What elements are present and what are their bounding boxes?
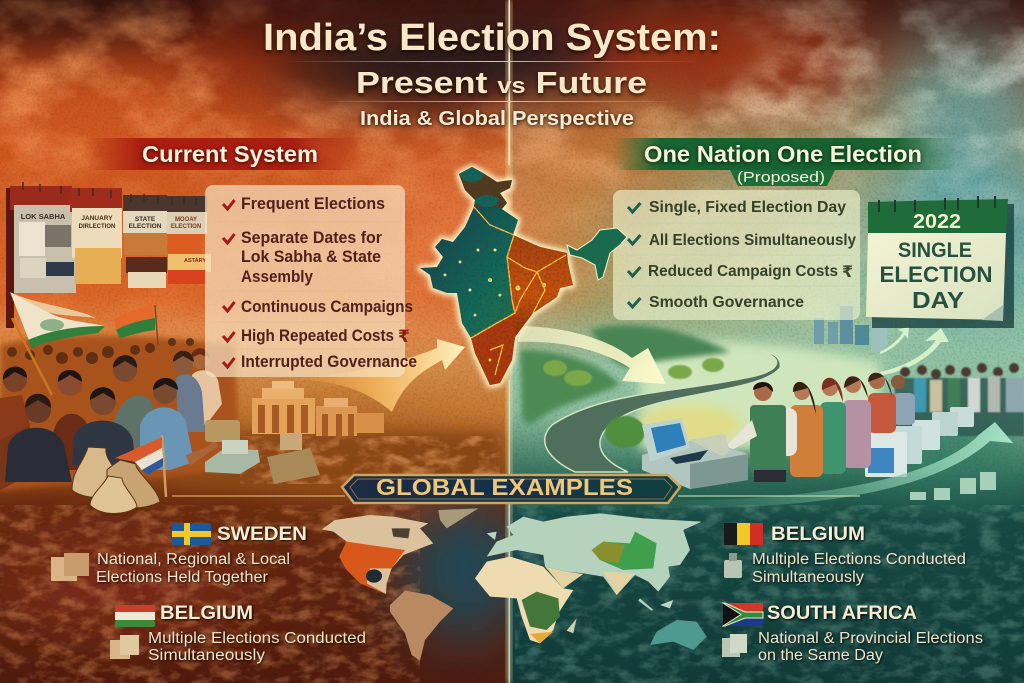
calendar: single election day	[866, 196, 1014, 328]
global examples section	[51, 474, 983, 664]
election calendars	[6, 182, 211, 328]
machine boxes	[205, 420, 320, 484]
list right: Smooth Governance	[649, 294, 804, 311]
road and river scene	[520, 325, 880, 472]
arrow into road	[518, 326, 666, 384]
world map	[322, 508, 707, 661]
flag: large tricolour	[10, 292, 105, 395]
distant crowd	[0, 336, 240, 490]
example: Sweden: National, Regional & Local	[97, 551, 290, 568]
panel: one nation one election	[612, 138, 957, 320]
heading banner: one nation one election	[612, 138, 957, 186]
arrow up 2	[880, 328, 949, 375]
example: South Africa	[722, 603, 983, 664]
calendar: Lok Sabha	[10, 186, 76, 293]
money bags	[72, 447, 160, 514]
ground mottling	[0, 505, 420, 683]
calendar: single election day: DAY	[912, 287, 964, 313]
person brown	[52, 370, 92, 470]
voter 3	[820, 378, 846, 474]
list left: Separate Dates for	[241, 228, 382, 247]
calendar: Monday election: ASTARY	[184, 258, 206, 264]
North America	[322, 515, 433, 594]
voter 4	[843, 376, 871, 468]
heading line 2: Present vs Future	[356, 65, 647, 100]
India map	[410, 160, 627, 400]
small upward arrows	[880, 326, 949, 375]
city skyline	[814, 306, 887, 352]
electronic voting machine	[642, 418, 748, 489]
arrow up 1	[880, 326, 909, 354]
eastern region	[508, 232, 573, 337]
man in green vest	[726, 382, 797, 482]
heading banner: current system	[84, 138, 364, 170]
example: Sweden	[51, 523, 307, 586]
flag on pole	[115, 435, 166, 497]
temple 2	[316, 398, 357, 436]
list left: Lok Sabha & State	[241, 247, 381, 266]
calendar: January	[70, 188, 122, 284]
north-east states	[567, 228, 627, 280]
list left: Continuous Campaigns	[241, 297, 413, 316]
northern region	[459, 167, 512, 208]
example: Sweden: Elections Held Together	[96, 569, 268, 586]
warm tint over clouds	[0, 0, 1024, 370]
example: Sweden: SWEDEN	[217, 524, 307, 545]
example: Belgium right: Simultaneously	[752, 569, 864, 586]
ballot boxes row	[865, 407, 996, 500]
list right: Single, Fixed Election Day	[649, 199, 846, 216]
example: Belgium left: Simultaneously	[148, 647, 265, 664]
calendar: Monday election	[167, 196, 211, 284]
list left	[241, 194, 417, 371]
example: South Africa: SOUTH AFRICA	[767, 603, 917, 624]
voter 6	[891, 375, 915, 425]
Eurasia	[487, 513, 702, 595]
voter 5	[868, 373, 896, 433]
crowd queue right	[895, 363, 1024, 436]
checks left	[223, 200, 234, 367]
heading banner: one nation one election: (Proposed)	[737, 169, 825, 186]
divider rails	[172, 495, 860, 497]
ballot boxes and money bags	[72, 420, 320, 514]
example: Belgium left	[110, 603, 366, 664]
person front dark	[5, 394, 72, 482]
subtitle: India & Global Perspective	[360, 108, 634, 130]
calendar: State election	[123, 195, 167, 288]
field and river	[640, 341, 880, 452]
Greenland	[438, 508, 478, 528]
list left: Frequent Elections	[241, 194, 385, 213]
title rule 2	[320, 101, 680, 102]
example: Belgium right: BELGIUM	[771, 524, 865, 545]
calendar: State election: ELECTION	[129, 223, 162, 230]
heading banner: current system: Current System	[142, 141, 318, 167]
calendar: single election day: SINGLE	[898, 239, 972, 262]
centre glow line	[507, 0, 511, 683]
left curved arrow	[290, 339, 465, 412]
title block	[263, 17, 721, 130]
example: Belgium left: BELGIUM	[160, 603, 253, 624]
calendar rings	[879, 196, 995, 212]
list right	[648, 199, 856, 311]
rings	[23, 182, 196, 206]
list left: ₹	[398, 327, 410, 346]
person blue-grey back	[173, 351, 205, 432]
example: South Africa: National & Provincial Elections	[758, 630, 983, 647]
heading banner: one nation one election: One Nation One Election	[644, 141, 922, 167]
person slate back	[112, 355, 153, 450]
title rule 1	[285, 61, 700, 62]
voters in line	[726, 373, 915, 482]
green sweep arrow	[660, 422, 1013, 508]
Africa	[475, 557, 573, 643]
bush	[605, 416, 645, 448]
flag: small tricolour	[114, 300, 158, 345]
EVM screen	[651, 423, 686, 453]
checks right	[628, 203, 640, 307]
banner: global examples	[342, 474, 680, 503]
person left edge	[0, 367, 40, 490]
calendar: State election: STATE	[135, 216, 156, 223]
person far right cream	[191, 348, 222, 425]
field foliage	[240, 436, 500, 484]
scene left: earth and temple	[175, 381, 500, 486]
left crowd	[0, 292, 240, 490]
example: South Africa: on the Same Day	[758, 647, 883, 664]
calendar: Lok Sabha: LOK SABHA	[21, 212, 66, 221]
China region	[592, 532, 657, 570]
calendar: single election day: ELECTION	[880, 262, 992, 287]
example: Belgium left: Multiple Elections Conducted	[148, 630, 366, 647]
road	[545, 352, 780, 472]
calendar: January: DIRLECTION	[79, 224, 115, 230]
temple 3	[356, 413, 384, 433]
example: Belgium right: Multiple Elections Conducted	[752, 551, 966, 568]
calendar: Monday election: ELECTION	[171, 224, 201, 230]
calendar: Monday election: MOOAY	[175, 217, 197, 223]
heading line 1: India’s Election System:	[263, 17, 721, 59]
person blue shirt	[140, 378, 218, 470]
list right: ₹	[842, 264, 853, 281]
cloud texture	[0, 0, 1024, 345]
South America	[390, 591, 453, 661]
Australia and islands	[650, 620, 707, 650]
list left: Assembly	[241, 267, 313, 286]
forest hills	[520, 325, 730, 425]
calendar: single election day: 2022	[913, 211, 961, 233]
banner: global examples: GLOBAL EXAMPLES	[376, 474, 633, 500]
calendar: January: JANUARY	[81, 215, 113, 222]
southern region	[471, 314, 516, 385]
temple 1	[252, 381, 315, 434]
person dark suit	[72, 387, 135, 465]
list right: Reduced Campaign Costs	[648, 263, 838, 280]
list right: All Elections Simultaneously	[649, 232, 856, 249]
list left: High Repeated Costs	[241, 326, 394, 345]
field	[175, 432, 500, 486]
small boxes on ground	[910, 472, 996, 500]
example: Belgium right	[724, 523, 966, 586]
panel: current system	[84, 138, 417, 377]
glowing network	[471, 207, 566, 375]
list left: Interrupted Governance	[241, 352, 417, 371]
voter 2	[790, 382, 823, 477]
